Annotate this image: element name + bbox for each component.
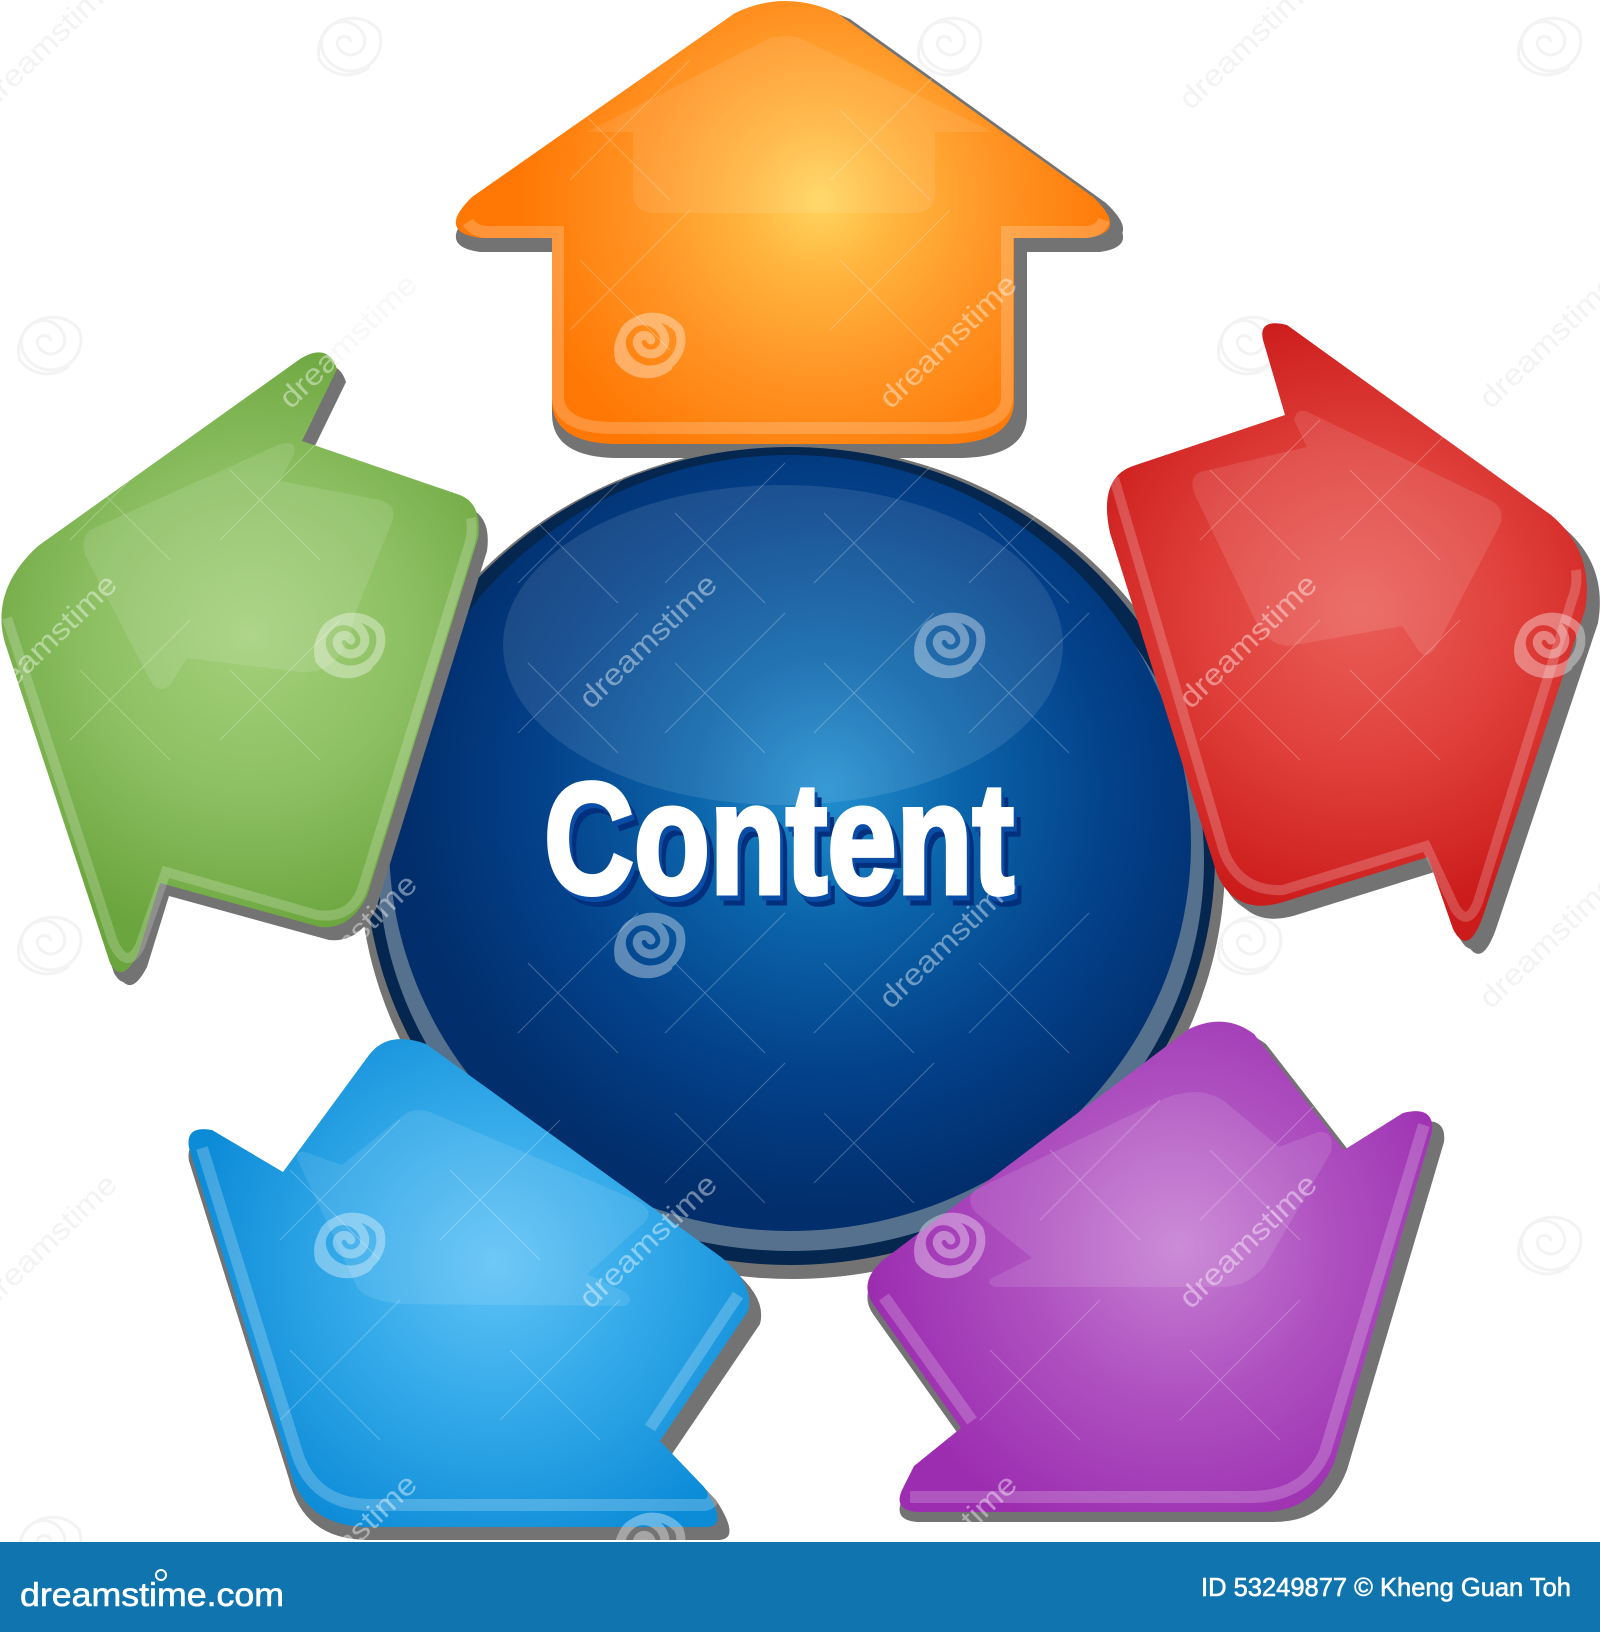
watermark overlay: dreamstime [873, 868, 1024, 1015]
watermark overlay: dreamstime [273, 868, 424, 1015]
circle gloss [503, 485, 1063, 805]
faint watermark on background: dreamstime [273, 268, 424, 415]
arrow: green (left) [1, 352, 488, 985]
footer credit: ID 53249877 © Kheng Guan Toh [1201, 1572, 1571, 1602]
red arrow shadow [1113, 331, 1600, 954]
footer logo text: dreamstime.com [20, 1576, 284, 1613]
red arrow body [1107, 323, 1587, 941]
red arrow bevel [1114, 478, 1576, 917]
watermark overlay: dreamstime [273, 268, 424, 415]
green arrow shadow [5, 362, 488, 985]
red arrow gloss [1192, 411, 1502, 655]
purple arrow gloss [970, 1092, 1332, 1287]
circle slate bevel [378, 471, 1204, 1251]
blue arrow gloss [297, 1110, 648, 1306]
purple arrow bevel [884, 1125, 1424, 1497]
arrow: red (right) [1107, 323, 1600, 954]
heading: Content: Content [551, 761, 1021, 937]
purple arrow shadow [867, 1032, 1444, 1522]
blue arrow body [188, 1039, 749, 1527]
circle shadow [359, 445, 1225, 1279]
watermark overlay: dreamstime [573, 568, 724, 715]
arrow: purple (lower right) [867, 1022, 1444, 1522]
watermark overlay: dreamstime [873, 268, 1024, 415]
green arrow bevel [7, 518, 472, 958]
watermark overlay: dreamstime [1173, 568, 1324, 715]
arrow: blue (lower left) [188, 1039, 761, 1540]
blue arrow shadow [188, 1052, 761, 1540]
green arrow body [1, 352, 479, 972]
centre circle [359, 445, 1225, 1279]
heading: Content: Content [547, 756, 1017, 932]
circle blue face [389, 455, 1191, 1231]
heading: Content: Content [544, 751, 1014, 927]
green arrow gloss [83, 443, 393, 689]
footer band [0, 1542, 1600, 1632]
footer logo spiral [156, 1570, 166, 1580]
watermark overlay: dreamstime [1173, 1168, 1324, 1315]
circle dark rim [365, 447, 1215, 1265]
orange arrow gloss [587, 36, 993, 213]
orange arrow body [456, 1, 1110, 444]
watermark overlay: dreamstime [573, 1168, 724, 1315]
purple arrow body [867, 1022, 1432, 1512]
orange arrow bevel [468, 220, 1104, 428]
arrow: orange (up) [456, 1, 1123, 458]
orange arrow shadow [456, 7, 1123, 458]
blue arrow bevel [202, 1148, 738, 1505]
watermark overlay: dreamstime [873, 1468, 1024, 1615]
watermark overlay: dreamstime [273, 1468, 424, 1615]
